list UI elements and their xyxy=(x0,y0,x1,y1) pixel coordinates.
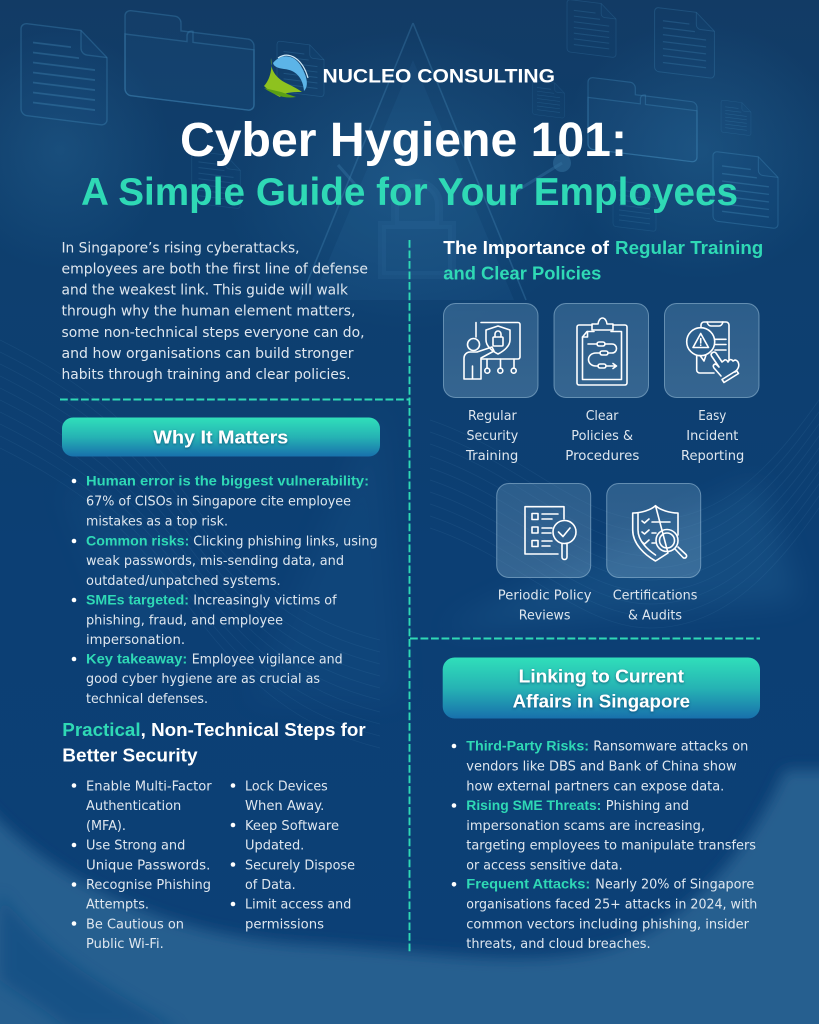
bullet list: steps column 1 xyxy=(72,779,212,952)
panel: training and policies xyxy=(443,238,763,623)
label: Security xyxy=(466,429,518,444)
bullet list: current affairs: vendors like DBS and Bank of China show xyxy=(466,759,737,774)
card: easy incident reporting xyxy=(664,304,759,464)
bullet list: steps column 1: Enable Multi-Factor xyxy=(86,779,212,794)
icon: presenter with shield xyxy=(464,322,520,379)
bullet list: why it matters: SMEs targeted: xyxy=(86,592,189,608)
bullet list: why it matters: outdated/unpatched systems. xyxy=(86,574,281,589)
bullet list: steps column 1: Recognise Phishing xyxy=(86,878,211,893)
label: Procedures xyxy=(565,449,639,464)
bullet list: steps column 2: permissions xyxy=(245,917,324,932)
heading button: linking to current affairs: Linking to Current xyxy=(519,666,684,686)
card: clear policies and procedures xyxy=(554,304,648,464)
bullet list: current affairs: common vectors including phishing, insider xyxy=(466,917,749,932)
heading: regular training and clear policies xyxy=(443,238,763,283)
label: Reporting xyxy=(681,449,744,464)
icon: checklist with magnifier xyxy=(525,507,576,560)
bullet list: steps column 1: Authentication xyxy=(86,799,181,814)
bullet list: current affairs: Phishing and xyxy=(606,799,689,814)
bullet list: steps column 1: (MFA). xyxy=(86,819,126,834)
bullet list: current affairs: organisations faced 25+ attacks in 2024, with xyxy=(466,898,757,913)
label xyxy=(465,409,518,464)
intro paragraph: habits through training and clear policies. xyxy=(62,366,350,383)
icon: shield with magnifier xyxy=(633,506,687,561)
bullet list: steps column 2: Limit access and xyxy=(245,898,351,913)
panel: why it matters xyxy=(62,418,380,707)
intro paragraph: In Singapore’s rising cyberattacks, xyxy=(62,239,300,256)
bullet list: current affairs: Ransomware attacks on xyxy=(593,740,748,755)
label: & Audits xyxy=(628,608,682,623)
bullet list: why it matters: Key takeaway: xyxy=(86,652,187,668)
bullet list: current affairs: or access sensitive data. xyxy=(466,858,623,873)
bullet list: why it matters: impersonation. xyxy=(86,633,185,648)
intro paragraph: employees are both the first line of defense xyxy=(62,260,368,277)
label xyxy=(565,409,639,464)
bullet list: steps column 1: Public Wi-Fi. xyxy=(86,937,164,952)
panel: current affairs xyxy=(443,658,760,952)
brand name: NUCLEO CONSULTING xyxy=(322,66,555,88)
intro paragraph: and the weakest link. This guide will walk xyxy=(62,282,349,298)
card: periodic policy reviews xyxy=(497,484,592,623)
bullet list: why it matters: weak passwords, mis-sending data, and xyxy=(86,554,344,569)
panel: practical steps xyxy=(62,720,366,952)
label: Periodic Policy xyxy=(498,588,592,603)
label: Policies & xyxy=(571,429,634,444)
bullet list: current affairs: Third-Party Risks: xyxy=(466,739,589,755)
background documents and folders xyxy=(21,0,778,232)
icon: clipboard with flowchart xyxy=(577,318,627,385)
bullet list: why it matters: technical defenses. xyxy=(86,692,208,707)
heading: regular training and clear policies: Regular Training xyxy=(615,238,763,258)
bullet list: current affairs: Rising SME Threats: xyxy=(466,798,601,814)
label xyxy=(613,588,697,623)
bullet list: current affairs: Frequent Attacks: xyxy=(466,877,590,893)
heading: practical steps: , Non-Technical Steps for xyxy=(141,720,366,740)
card: regular security training xyxy=(444,304,538,464)
heading: practical steps: Better Security xyxy=(62,745,198,765)
bullet list: why it matters xyxy=(72,474,378,707)
section dividers xyxy=(60,240,760,952)
bullet list: why it matters: Common risks: xyxy=(86,534,189,550)
background triangle and lock xyxy=(300,23,571,300)
heading: practical steps: Practical xyxy=(62,720,141,740)
bullet list: steps column 1: Unique Passwords. xyxy=(86,858,210,873)
bullet list: steps column 2: Securely Dispose xyxy=(245,858,355,873)
card: certifications and audits xyxy=(607,484,701,623)
label: Reviews xyxy=(519,608,571,623)
heading: practical steps xyxy=(62,720,366,765)
intro paragraph: some non-technical steps everyone can do, xyxy=(62,324,364,341)
bullet list: steps column 2: Keep Software xyxy=(245,819,339,834)
bullet list: steps column 1: Be Cautious on xyxy=(86,917,184,932)
bullet list: current affairs: Nearly 20% of Singapore xyxy=(595,878,754,893)
bullet list: steps column 2: Updated. xyxy=(245,839,304,854)
intro paragraph: through why the human element matters, xyxy=(62,303,356,320)
heading button: linking to current affairs: Affairs in Singapore xyxy=(513,691,690,711)
bullet list: why it matters: Employee vigilance and xyxy=(192,653,343,668)
title xyxy=(81,114,738,214)
heading: regular training and clear policies: The Importance of xyxy=(443,238,610,258)
bullet list: current affairs: how external partners can expose data. xyxy=(466,779,724,794)
label: Training xyxy=(465,449,518,464)
icon: logo swoosh xyxy=(264,55,308,98)
heading button: linking to current affairs xyxy=(443,658,760,718)
label: Incident xyxy=(686,429,738,444)
label xyxy=(498,588,592,623)
bullet list: steps column 2: When Away. xyxy=(245,799,324,814)
bullet list: steps column 2: of Data. xyxy=(245,878,296,893)
bullet list: why it matters: phishing, fraud, and employee xyxy=(86,613,283,628)
bullet list: steps column 1: Use Strong and xyxy=(86,839,185,854)
bullet list: why it matters: Increasingly victims of xyxy=(193,593,337,608)
label: Certifications xyxy=(613,588,697,603)
bullet list: current affairs: targeting employees to manipulate transfers xyxy=(466,839,756,854)
bullet list: why it matters: 67% of CISOs in Singapore cite employee xyxy=(86,495,351,510)
label xyxy=(681,409,744,464)
label: Easy xyxy=(698,409,726,424)
icon: phone with alert and hand xyxy=(687,322,739,382)
bullet list: why it matters: mistakes as a top risk. xyxy=(86,515,228,530)
intro paragraph xyxy=(62,239,368,383)
label: Clear xyxy=(586,409,619,424)
bullet list: why it matters: Human error is the biggest vulnerability: xyxy=(86,474,369,490)
background wave lines xyxy=(0,340,819,748)
subtitle: A Simple Guide for Your Employees xyxy=(81,171,738,214)
bullet list: steps column 2 xyxy=(231,779,355,932)
intro paragraph: and how organisations can build stronger xyxy=(62,345,354,362)
bullet list: steps column 1: Attempts. xyxy=(86,898,149,913)
bullet list: current affairs xyxy=(452,739,757,952)
title: Cyber Hygiene 101: xyxy=(180,114,627,167)
heading button: why it matters xyxy=(62,418,380,456)
bullet list: current affairs: impersonation scams are increasing, xyxy=(466,819,705,834)
heading button: why it matters: Why It Matters xyxy=(153,428,288,448)
heading: regular training and clear policies: and Clear Policies xyxy=(443,263,601,283)
bullet list: current affairs: threats, and cloud breaches. xyxy=(466,937,651,952)
bullet list: steps column 2: Lock Devices xyxy=(245,779,328,794)
label: Regular xyxy=(468,409,517,424)
bullet list: why it matters: Clicking phishing links, using xyxy=(193,535,378,550)
bullet list: why it matters: good cyber hygiene are as crucial as xyxy=(86,672,320,687)
logo xyxy=(264,55,555,98)
